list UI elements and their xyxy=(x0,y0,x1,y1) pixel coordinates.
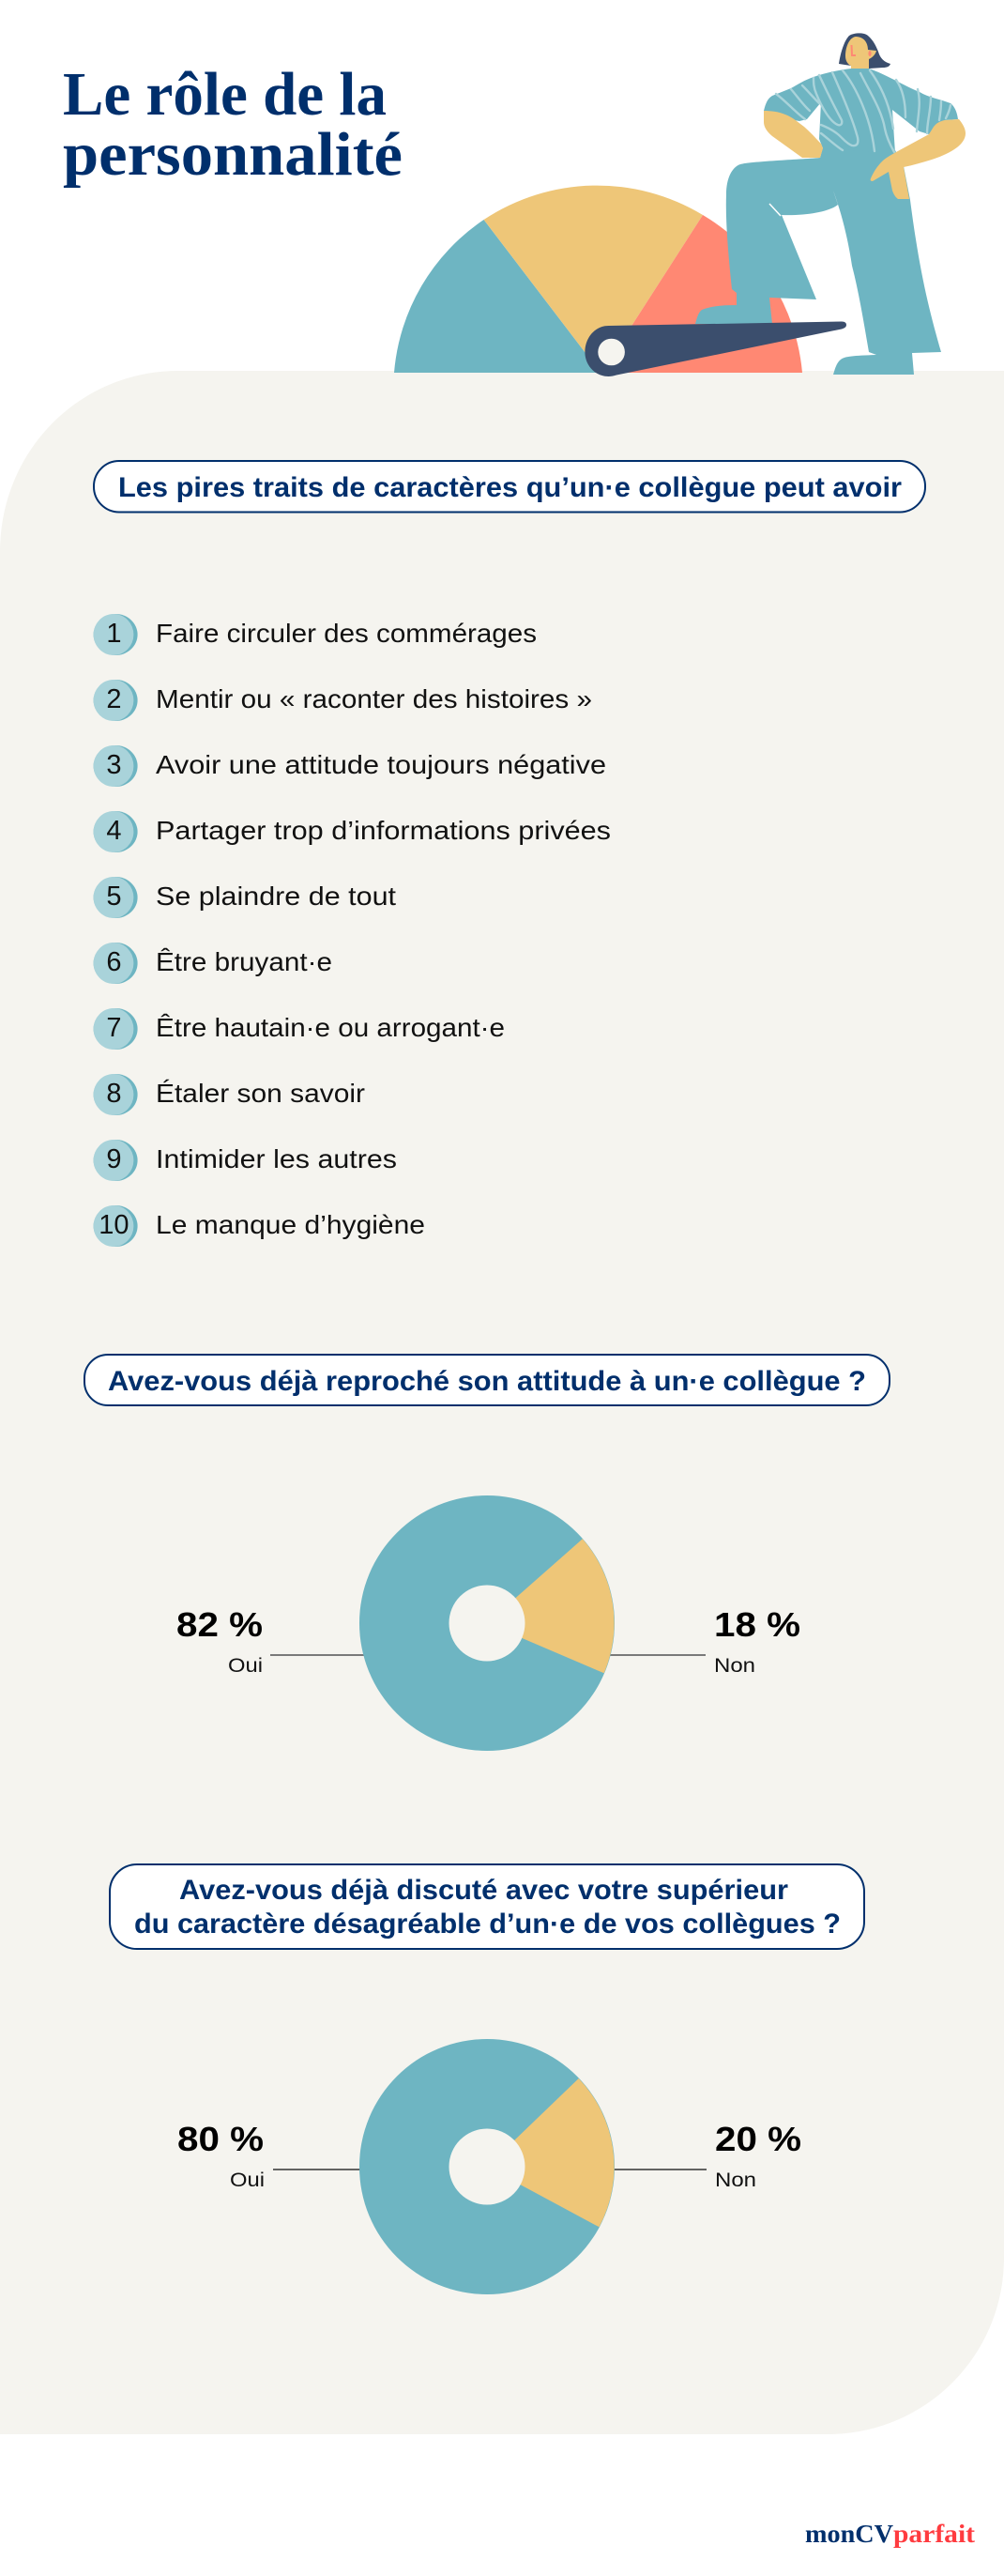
item 2: Mentir ou « raconter des histoires » xyxy=(156,684,592,713)
item 1: Faire circuler des commérages xyxy=(156,619,537,648)
item 6 xyxy=(94,943,332,984)
item 10: Le manque d’hygiène xyxy=(156,1210,425,1239)
heading pill: reproached attitude xyxy=(84,1355,890,1405)
item 8 xyxy=(94,1074,365,1115)
heading pill: reproached attitude: Avez-vous déjà reproché son attitude à un·e collègue ? xyxy=(108,1366,866,1397)
numbered list xyxy=(94,614,611,1247)
item 1 xyxy=(94,614,537,655)
item 3 xyxy=(94,745,606,787)
title xyxy=(63,60,403,189)
item 3: 3 xyxy=(106,750,121,780)
label: 82 % Oui: 82 % xyxy=(176,1605,263,1644)
item 5: 5 xyxy=(106,882,121,912)
title: Le rôle de la xyxy=(63,60,387,129)
item 5: Se plaindre de tout xyxy=(156,882,396,911)
heading pill: discussed with superior: du caractère désagréable d’un·e de vos collègues ? xyxy=(134,1909,841,1940)
item 9: 9 xyxy=(106,1144,121,1174)
heading pill: worst traits: Les pires traits de caractères qu’un·e collègue peut avoir xyxy=(118,472,902,503)
item 8: Étaler son savoir xyxy=(156,1079,365,1108)
title: personnalité xyxy=(63,120,403,189)
face xyxy=(845,37,876,69)
label: 20 % Non: Non xyxy=(715,2170,756,2191)
label: 18 % Non xyxy=(714,1605,800,1677)
item 1: 1 xyxy=(106,619,121,649)
gauge dial xyxy=(394,186,802,373)
donut chart: 80 / 20 xyxy=(177,2039,801,2294)
item 10 xyxy=(94,1205,425,1247)
item 9: Intimider les autres xyxy=(156,1144,397,1173)
label: 82 % Oui xyxy=(176,1605,263,1677)
gauge needle xyxy=(585,321,846,376)
donut chart: 82 / 18 xyxy=(176,1495,800,1751)
item 7 xyxy=(94,1008,505,1050)
shirt stripes xyxy=(776,70,951,152)
label: 80 % Oui: 80 % xyxy=(177,2120,264,2158)
label: 80 % Oui xyxy=(177,2120,265,2191)
item 7: 7 xyxy=(106,1013,121,1043)
item 10: 10 xyxy=(99,1210,129,1240)
item 7: Être hautain·e ou arrogant·e xyxy=(156,1013,505,1042)
heading pill: worst traits xyxy=(94,461,925,513)
label: 18 % Non: Non xyxy=(714,1655,755,1677)
shirt xyxy=(764,69,958,153)
item 6: Être bruyant·e xyxy=(156,947,332,976)
logo: parfait xyxy=(893,2520,975,2548)
arm left xyxy=(764,111,823,158)
item 5 xyxy=(94,877,396,918)
logo xyxy=(805,2520,975,2548)
item 2: 2 xyxy=(106,684,121,714)
item 2 xyxy=(94,680,592,721)
label: 82 % Oui: Oui xyxy=(228,1655,263,1677)
heading pill: discussed with superior: Avez-vous déjà discuté avec votre supérieur xyxy=(179,1875,788,1906)
item 4: Partager trop d’informations privées xyxy=(156,816,611,845)
label: 18 % Non: 18 % xyxy=(714,1605,800,1644)
trousers xyxy=(695,147,941,375)
label: 20 % Non xyxy=(715,2120,801,2191)
logo: monCV xyxy=(805,2520,894,2548)
label: 80 % Oui: Oui xyxy=(230,2170,265,2191)
item 9 xyxy=(94,1140,397,1181)
item 4: 4 xyxy=(106,816,121,846)
hair xyxy=(839,33,890,69)
arm right xyxy=(871,119,966,199)
item 6: 6 xyxy=(106,947,121,977)
woman figure xyxy=(695,33,966,375)
item 8: 8 xyxy=(106,1079,121,1109)
item 4 xyxy=(94,811,611,852)
label: 20 % Non: 20 % xyxy=(715,2120,801,2158)
heading pill: discussed with superior xyxy=(110,1864,864,1949)
illustration: gauge and standing woman xyxy=(394,33,966,376)
item 3: Avoir une attitude toujours négative xyxy=(156,750,606,779)
